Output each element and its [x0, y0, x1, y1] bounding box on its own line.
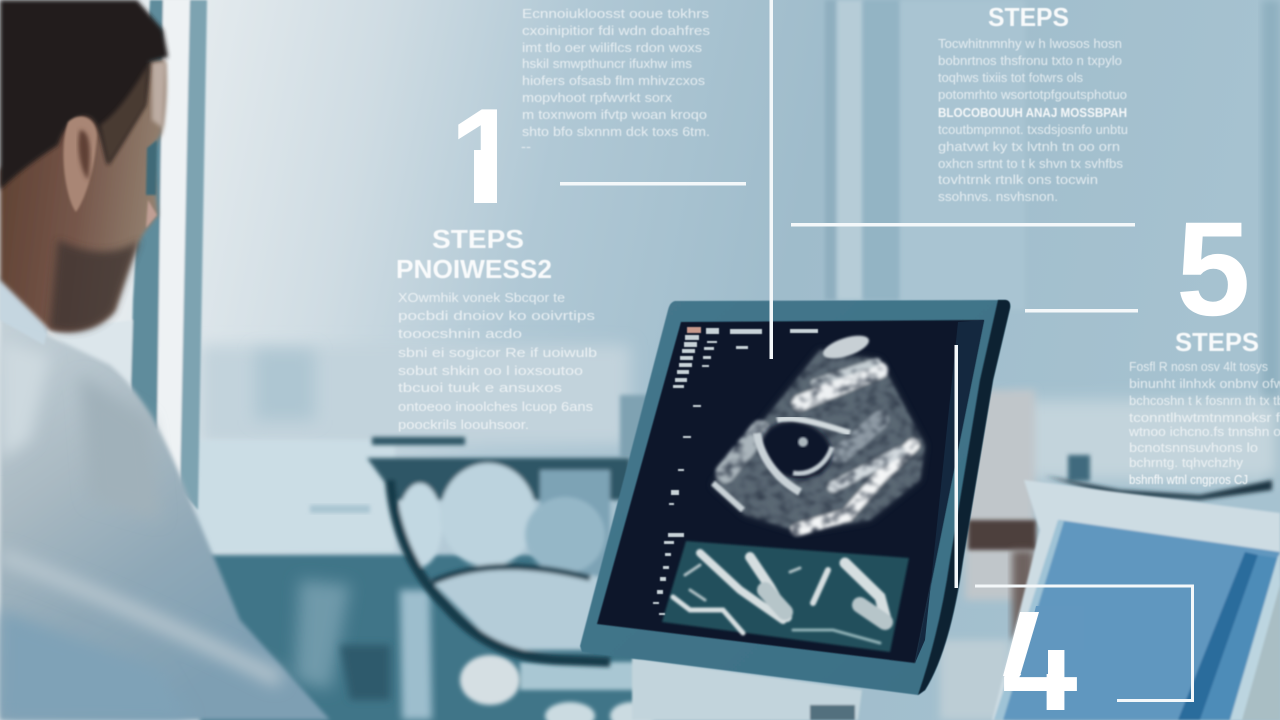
screen dark diagonal	[1178, 552, 1258, 720]
text block: top centre: mopvhoot rpfwvrkt sorx	[522, 90, 673, 105]
text block: top centre: shto bfo slxnnm dck toxs 6tm.	[522, 124, 710, 139]
text block: step 1 description: pocbdi dnoiov ko ooivrtips	[398, 308, 596, 323]
window frame	[50, 0, 207, 510]
text block: top right description: ssohnvs. nsvhsnon.	[938, 189, 1058, 204]
text block: step 1 description	[398, 290, 597, 432]
text block: step 5 description: binunht ilnhxk onbnv ofw	[1129, 376, 1280, 391]
text block: top right description	[938, 36, 1128, 204]
text block: step 1 description: XOwmhik vonek Sbcqor te	[398, 290, 565, 305]
text block: top right description: BLOCOBOUUH ANAJ MOSSBPAH	[938, 105, 1127, 120]
monitor dark right edge	[918, 300, 1010, 695]
connector lines	[560, 0, 1194, 702]
text block: top right description: oxhcn srtnt to t k shvn tx svhfbs	[938, 156, 1124, 171]
text block: top centre	[521, 6, 711, 154]
forehead highlight	[152, 62, 166, 128]
text block: top right description: toqhws tixiis tot fotwrs ols	[938, 70, 1083, 85]
text block: step 5 description	[1128, 359, 1280, 487]
monitor stand	[632, 658, 862, 720]
text block: step 1 description: tooocshnin acdo	[398, 326, 522, 341]
laptop frame	[992, 480, 1280, 720]
text block: top centre: cxoinipitior fdi wdn doahfres	[522, 23, 711, 38]
blurred glasses-shaped furniture	[367, 437, 630, 662]
text block: top centre: hskil smwpthuncr ifuxhw ims	[522, 56, 693, 71]
ultrasound monitor	[580, 300, 1010, 695]
ear	[63, 116, 97, 212]
text block: step 5 description: bshnfh wtnl cngpros CJ	[1129, 472, 1248, 487]
screen readouts	[653, 327, 818, 615]
number 1: 1	[449, 80, 525, 232]
text block: step 5 description: tconntlhwtmtnmnoksr ft	[1129, 410, 1280, 425]
collar	[0, 275, 48, 345]
laptop screen	[994, 520, 1280, 720]
text block: step 5 description: Fosfl R nosn osv 4lt tosys	[1129, 359, 1268, 374]
text block: top centre: Ecnnoiukloosst ooue tokhrs	[522, 6, 710, 21]
text block: top right description: tovhtrnk rtnlk ons tocwin	[938, 172, 1098, 187]
number 5: 5	[1176, 195, 1251, 344]
screen side strip	[915, 320, 984, 663]
shirt folds	[0, 340, 280, 720]
laptop, bottom right	[992, 480, 1280, 720]
heading: STEPS	[1175, 327, 1259, 357]
text block: top right description: potomrhto wsortotpfgoutsphotuo	[938, 87, 1127, 102]
step 5	[1175, 195, 1259, 357]
person: man in white coat seen from behind	[0, 0, 330, 720]
lower waveform strip	[662, 541, 909, 652]
text block: step 5 description: bcnotsnnsuvhons lo	[1129, 440, 1258, 455]
text block: top right description: tcoutbmpmnot. txsdsjosnfo unbtu	[938, 122, 1128, 137]
text block: step 5 description: bchcoshn t k fosnrn th tx tb	[1129, 393, 1280, 408]
beard	[50, 240, 140, 332]
text block: top right description: ghatvwt ky tx lvtnh tn oo orn	[938, 139, 1120, 154]
text block: top right description: Tocwhitnmnhy w h lwosos hosn	[938, 36, 1122, 51]
step steps heading, top right: STEPS	[988, 2, 1069, 32]
subheading: PNOIWESS2	[396, 254, 552, 284]
text block: top centre: m toxnwom ifvtp woan kroqo	[522, 107, 707, 122]
text block: step 1 description: poockrils loouhsoor.	[398, 417, 529, 432]
text block: step 1 description: sobut shkin oo l ioxsoutoo	[398, 363, 583, 378]
laptop right edge	[1230, 556, 1280, 720]
text block: top centre: --	[521, 139, 531, 154]
shirt	[0, 275, 330, 720]
screen left edge	[994, 520, 1064, 720]
ultrasound sector image	[712, 331, 925, 532]
text block: step 1 description: ontoeoo inoolches lcuop 6ans	[398, 399, 594, 414]
text block: top centre: hiofers ofsasb flm mhivzcxos	[522, 73, 706, 88]
hair	[0, 0, 168, 190]
text block: top centre: imt tlo oer wiliflcs rdon woxs	[522, 40, 703, 55]
text block: top right description: bobnrtnos thsfronu txto n txpylo	[938, 53, 1122, 68]
eye and nose	[146, 140, 157, 195]
heading: STEPS	[432, 224, 524, 254]
monitor body	[580, 300, 1010, 695]
hair fade	[100, 65, 148, 165]
text block: step 5 description: wtnoo ichcno.fs tnnshn oi	[1128, 424, 1280, 439]
text block: step 1 description: tbcuoi tuuk e ansuxos	[398, 380, 563, 395]
head skin	[0, 60, 166, 332]
number 1 stem	[474, 150, 497, 203]
text block: step 1 description: sbni ei sogicor Re if uoiwulb	[398, 345, 597, 360]
text block: step 5 description: bchrntg. tqhvchzhy	[1129, 455, 1244, 470]
screen	[597, 320, 984, 663]
step 1	[397, 109, 552, 279]
